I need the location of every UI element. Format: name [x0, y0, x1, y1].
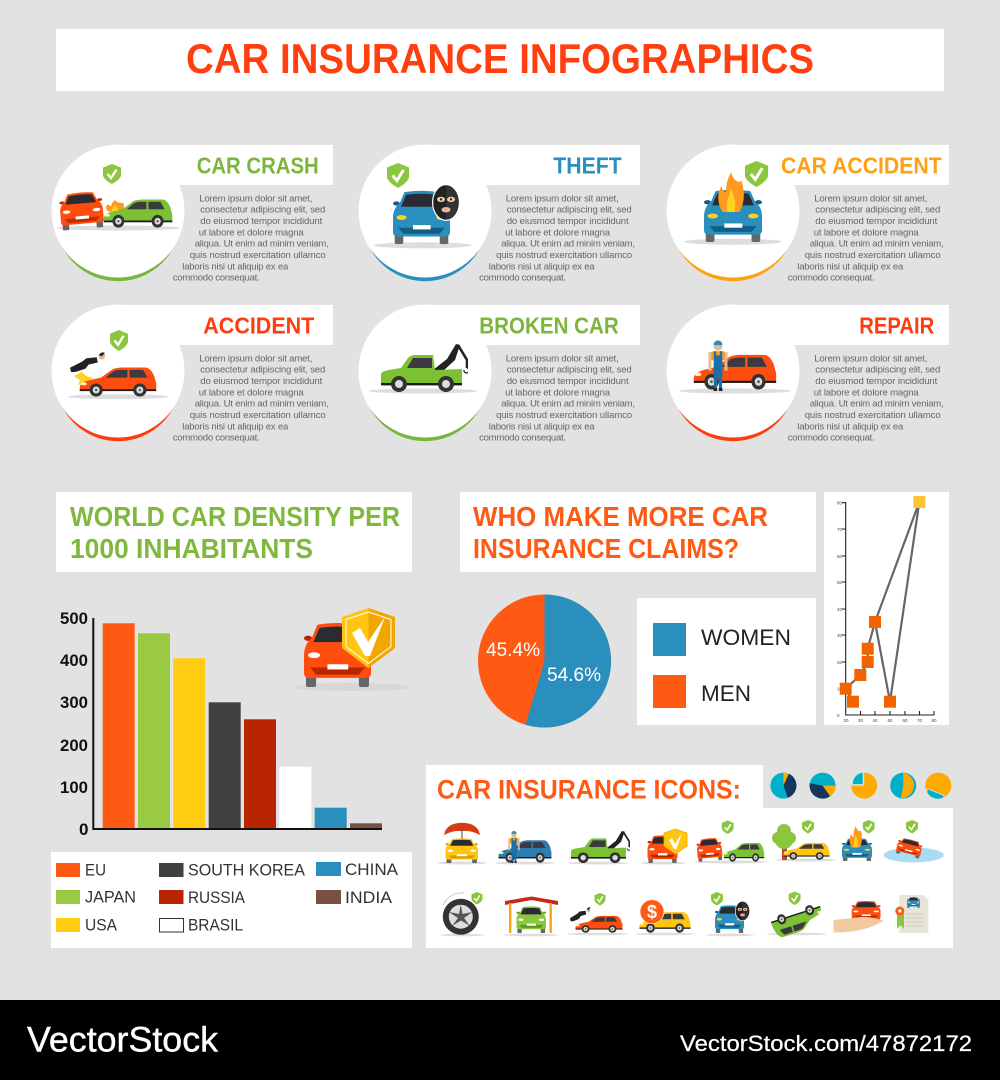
text block: car accident [788, 194, 944, 284]
y axis labels: 60 [837, 554, 843, 559]
text block: car accident: do eiusmod tempor incididunt [815, 216, 938, 227]
icon: red car with shield [641, 829, 687, 864]
small pie 4 [890, 773, 916, 799]
text block: broken car: commodo consequat. [479, 433, 566, 444]
heading: who make more claims: WHO MAKE MORE CAR [473, 501, 768, 532]
legend: women and men: WOMEN [701, 625, 791, 650]
title: CAR INSURANCE INFOGRAPHICS [186, 35, 814, 82]
axis labels: 0 [79, 820, 88, 839]
text block: theft: Lorem ipsum dolor sit amet, [506, 194, 619, 205]
heading: world car density [56, 492, 412, 572]
legend: countries [51, 852, 412, 948]
text block: car accident: quis nostrud exercitation ullamco [805, 250, 941, 261]
text block: car accident: aliqua. Ut enim ad minim veniam, [810, 239, 944, 250]
heading: world car density: 1000 INHABITANTS [70, 533, 313, 564]
data points [840, 496, 925, 708]
small pie 5 [925, 773, 951, 799]
legend: countries: SOUTH KOREA [188, 861, 306, 880]
panel: car crash [52, 144, 333, 284]
x axis labels: 70 [917, 718, 923, 723]
text block: car accident: Lorem ipsum dolor sit amet, [814, 194, 927, 205]
text block: repair: commodo consequat. [788, 433, 875, 444]
legend: countries: CHINA [345, 860, 399, 879]
text block: repair [788, 354, 944, 444]
text block: car crash [173, 194, 329, 284]
icon: hand holding car [834, 901, 884, 933]
icon: car with dollar coin: $ [647, 902, 657, 922]
text block: theft [479, 194, 635, 284]
text block: theft: aliqua. Ut enim ad minim veniam, [501, 239, 635, 250]
text block: car accident: laboris nisi ut aliquip ex ea [797, 261, 904, 272]
heading: who make more claims [460, 492, 816, 572]
icon: insurance document [895, 895, 928, 933]
text block: accident: laboris nisi ut aliquip ex ea [182, 421, 289, 432]
axis labels [60, 609, 88, 839]
text block: theft: consectetur adipiscing elit, sed [507, 205, 632, 216]
icon: tow truck [369, 344, 477, 394]
legend: women and men [637, 598, 816, 725]
icon: green tow truck [568, 831, 631, 864]
axes [93, 618, 382, 829]
y axis labels: 10 [837, 686, 843, 692]
text block: car crash: ut labore et dolore magna [199, 227, 304, 238]
text block: broken car: aliqua. Ut enim ad minim veniam, [501, 399, 635, 410]
axis labels: 500 [60, 609, 88, 628]
icon: flooded car [884, 820, 944, 862]
text block: accident: quis nostrud exercitation ullamco [190, 410, 326, 421]
text block: accident [173, 354, 329, 444]
text block: broken car: laboris nisi ut aliquip ex ea [489, 421, 595, 432]
heading: broken car: BROKEN CAR [479, 312, 619, 338]
heading: world car density: WORLD CAR DENSITY PER [70, 501, 400, 532]
icon: crash small [695, 820, 767, 864]
footer watermark bar: VectorStock [27, 1020, 219, 1060]
y axis labels: 80 [837, 500, 843, 506]
panel: car insurance icons [426, 765, 953, 948]
legend: women and men: MEN [701, 681, 751, 706]
small pie 2 [810, 773, 836, 799]
text block: repair: Lorem ipsum dolor sit amet, [814, 354, 927, 365]
bars [103, 623, 382, 829]
icon: tire [440, 892, 484, 936]
x axis labels [844, 718, 937, 723]
text block: car accident: commodo consequat. [788, 273, 875, 284]
heading: car accident: CAR ACCIDENT [781, 152, 942, 178]
text block: broken car [479, 354, 635, 444]
small pie charts [770, 773, 951, 799]
text block: accident: aliqua. Ut enim ad minim veniam, [195, 399, 329, 410]
icon: crash illustration [56, 164, 180, 231]
panel: theft [358, 144, 640, 284]
legend: countries: USA [85, 915, 118, 934]
text block: accident: Lorem ipsum dolor sit amet, [199, 354, 312, 365]
y axis labels: 0 [837, 713, 840, 718]
icon: pedestrian hit by car [68, 330, 168, 399]
axis labels: 400 [60, 651, 88, 670]
text block: repair: quis nostrud exercitation ullamco [805, 410, 941, 421]
text block: accident: consectetur adipiscing elit, sed [200, 365, 325, 376]
axis labels: 200 [60, 736, 88, 755]
text block: car accident: ut labore et dolore magna [814, 227, 919, 238]
text block: accident: ut labore et dolore magna [199, 387, 304, 398]
text block: accident: commodo consequat. [173, 433, 260, 444]
heading: repair: REPAIR [859, 312, 935, 338]
y axis labels: 50 [837, 580, 843, 585]
icon: insured car with shield [294, 608, 410, 691]
text block: repair: do eiusmod tempor incididunt [815, 376, 938, 387]
x axis labels: 40 [872, 718, 878, 723]
text block: theft: quis nostrud exercitation ullamco [496, 250, 632, 261]
icon: car in garage [503, 896, 559, 936]
text block: repair: laboris nisi ut aliquip ex ea [797, 421, 904, 432]
icon: stolen car with masked thief [374, 163, 472, 248]
text block: car accident: consectetur adipiscing elit, sed [815, 205, 940, 216]
small pie 3 [851, 773, 877, 799]
footer watermark bar [0, 1000, 1000, 1080]
footer watermark bar: VectorStock.com/47872172 [680, 1031, 972, 1056]
text block: car crash: consectetur adipiscing elit, sed [200, 205, 325, 216]
axis labels: 100 [60, 778, 88, 797]
text block: accident: do eiusmod tempor incididunt [200, 376, 323, 387]
heading: accident: ACCIDENT [203, 312, 314, 338]
text block: theft: do eiusmod tempor incididunt [507, 216, 629, 227]
legend: countries: INDIA [345, 888, 393, 907]
heading: theft: THEFT [553, 152, 622, 178]
icon: car hit tree [772, 820, 836, 862]
pie chart: claims by gender [478, 594, 611, 728]
small pie 1 [770, 773, 796, 799]
icon: thief small [706, 892, 754, 936]
text block: repair: ut labore et dolore magna [814, 387, 919, 398]
text block: car crash: laboris nisi ut aliquip ex ea [182, 261, 289, 272]
heading: car insurance icons: CAR INSURANCE ICONS: [437, 774, 741, 804]
y axis labels: 70 [837, 527, 843, 532]
text block: car crash: commodo consequat. [173, 273, 260, 284]
icon: umbrella car [437, 823, 487, 864]
text block: broken car: quis nostrud exercitation ullamco [496, 410, 632, 421]
icon: car on fire [684, 161, 782, 245]
text block: car crash: quis nostrud exercitation ullamco [190, 250, 326, 261]
x axis labels: 50 [888, 718, 893, 723]
x axis labels: 60 [902, 718, 908, 723]
legend: countries: JAPAN [85, 888, 136, 907]
text block: car crash: do eiusmod tempor incididunt [200, 216, 323, 227]
text block: repair: consectetur adipiscing elit, sed [815, 365, 940, 376]
panel: broken car [358, 304, 640, 444]
text block: repair: aliqua. Ut enim ad minim veniam, [810, 399, 944, 410]
panel: car accident [666, 144, 949, 284]
x axis labels: 20 [844, 718, 849, 723]
text block: car crash: aliqua. Ut enim ad minim veniam, [195, 239, 329, 250]
panel: repair [666, 304, 949, 444]
y axis labels: 30 [837, 633, 843, 638]
text block: theft: ut labore et dolore magna [505, 227, 611, 238]
line chart: scatter [824, 492, 949, 725]
icon: car with dollar coin [635, 900, 695, 935]
heading: who make more claims: INSURANCE CLAIMS? [473, 533, 739, 564]
icon: overturned car [767, 892, 827, 939]
text block: theft: laboris nisi ut aliquip ex ea [489, 261, 595, 272]
y axis labels: 40 [837, 607, 843, 612]
axis labels: 300 [60, 693, 88, 712]
panel: accident [52, 304, 333, 444]
icon: car on fire small [842, 820, 875, 861]
text block: car crash: Lorem ipsum dolor sit amet, [199, 194, 312, 205]
title [56, 29, 944, 91]
text block: broken car: consectetur adipiscing elit, sed [507, 365, 632, 376]
x axis labels: 30 [858, 718, 864, 723]
text block: broken car: Lorem ipsum dolor sit amet, [506, 354, 619, 365]
pie chart: claims by gender: 45.4% [486, 640, 540, 661]
icon: mechanic with blue car [495, 831, 555, 864]
text block: theft: commodo consequat. [479, 273, 566, 284]
text block: broken car: ut labore et dolore magna [505, 387, 611, 398]
y axis labels [837, 500, 843, 718]
bar chart: world car density [60, 609, 382, 839]
legend: countries: EU [85, 861, 106, 880]
heading: car crash: CAR CRASH [197, 152, 319, 178]
x axis labels: 80 [932, 718, 937, 723]
legend: countries: BRASIL [188, 916, 243, 934]
icon: mechanic and car [679, 341, 791, 394]
legend: countries: RUSSIA [188, 888, 246, 907]
pie chart: claims by gender: 54.6% [547, 665, 601, 686]
y axis labels: 20 [837, 660, 843, 665]
text block: broken car: do eiusmod tempor incididunt [507, 376, 629, 387]
icon: pedestrian accident small [568, 893, 628, 935]
